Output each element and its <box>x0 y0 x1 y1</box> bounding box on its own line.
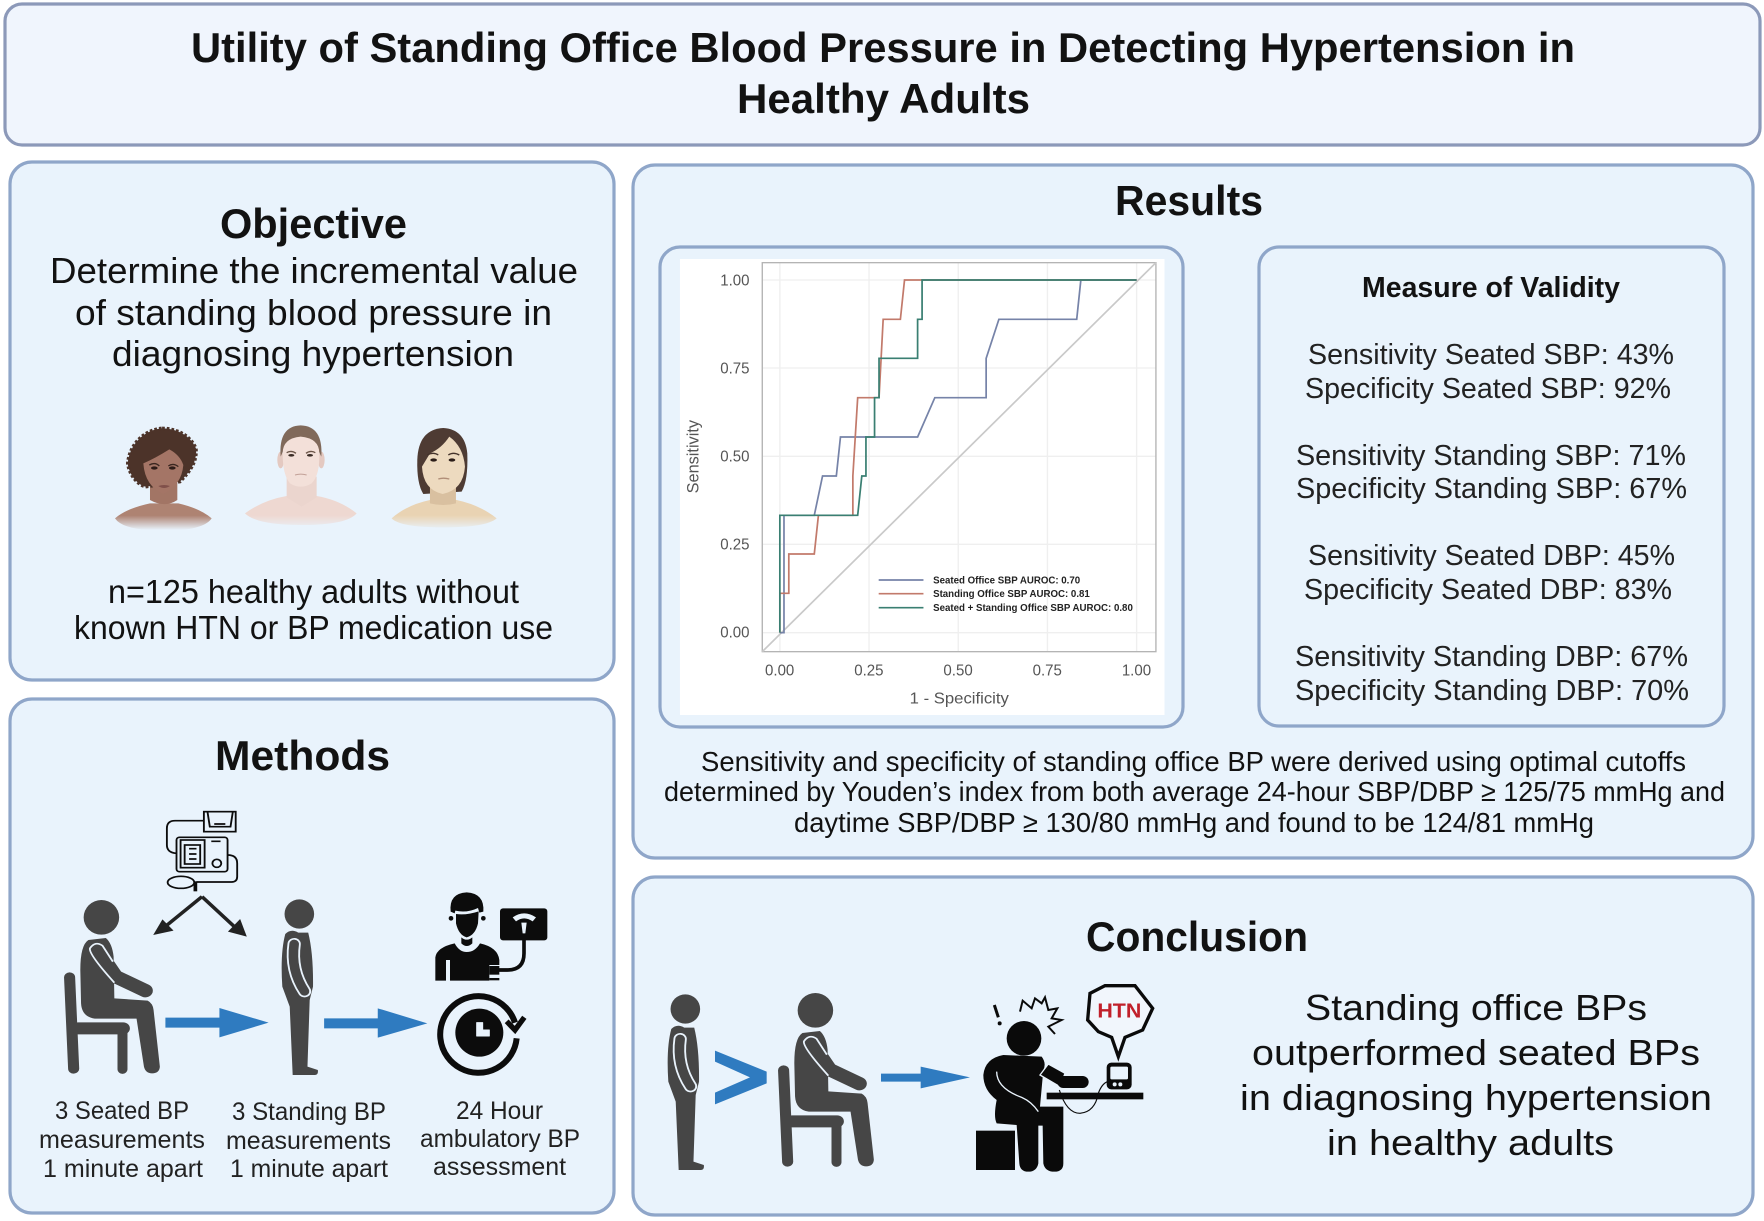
arrow: seated to standing <box>165 1008 269 1037</box>
panel: measure of validity <box>1259 247 1724 726</box>
y axis labels: 0.25 <box>720 537 750 554</box>
caption: standing: 3 Standing BP <box>232 1098 386 1126</box>
y axis labels: 1.00 <box>720 273 750 289</box>
icon: blood pressure device <box>167 812 237 891</box>
objective heading: Objective <box>220 200 407 247</box>
icon: three adult faces <box>115 425 497 531</box>
icon: standing person <box>668 994 704 1170</box>
validity: seated SBP: Specificity Seated SBP: 92% <box>1305 373 1671 405</box>
y axis labels <box>720 273 750 642</box>
results heading: Results <box>1115 177 1263 224</box>
caption: seated: measurements <box>39 1126 205 1154</box>
face: east asian woman <box>392 428 497 527</box>
objective text <box>50 250 578 374</box>
speech bubble: HTN <box>1088 986 1153 1057</box>
results description text: Sensitivity and specificity of standing office BP were derived using optimal cutoffs <box>701 746 1686 777</box>
conclusion text: Standing office BPs <box>1305 987 1647 1028</box>
chart legend: Standing Office SBP AUROC: 0.81 <box>933 589 1090 600</box>
validity: standing DBP: Sensitivity Standing DBP: 67% <box>1295 641 1688 673</box>
caption: ambulatory: 24 Hour <box>456 1097 543 1125</box>
objective sample text <box>74 573 553 646</box>
results description text <box>664 746 1725 838</box>
caption: standing <box>226 1098 391 1183</box>
caption: ambulatory <box>420 1097 580 1181</box>
methods heading: Methods <box>215 732 390 779</box>
validity: standing DBP: Specificity Standing DBP: 70% <box>1295 675 1689 707</box>
x axis labels: 0.25 <box>854 663 884 680</box>
validity: standing SBP: Sensitivity Standing SBP: 71% <box>1296 440 1686 472</box>
title <box>191 24 1575 122</box>
validity: standing SBP: Specificity Standing SBP: 67% <box>1296 473 1687 505</box>
y axis labels: 0.00 <box>720 625 750 642</box>
objective text: of standing blood pressure in <box>75 292 552 333</box>
validity: standing SBP <box>1296 440 1687 505</box>
face: dark skin woman <box>115 428 212 531</box>
conclusion text: in diagnosing hypertension <box>1240 1077 1712 1118</box>
comparison and arrow <box>715 1051 970 1104</box>
caption: standing: 1 minute apart <box>230 1155 388 1183</box>
validity: seated DBP: Specificity Seated DBP: 83% <box>1304 574 1672 606</box>
icon: patient with hypertension reading <box>976 986 1153 1172</box>
chart legend: Seated + Standing Office SBP AUROC: 0.80 <box>933 603 1133 614</box>
icon: standing person <box>282 899 318 1075</box>
x axis labels: 0.75 <box>1033 663 1062 680</box>
panel: ROC chart card <box>660 247 1183 727</box>
objective text: diagnosing hypertension <box>112 333 514 374</box>
curve: seated plus standing office SBP <box>780 280 1137 633</box>
validity: seated DBP: Sensitivity Seated DBP: 45% <box>1308 540 1675 572</box>
icon: 24 hour clock <box>440 996 524 1073</box>
objective text: Determine the incremental value <box>50 250 578 291</box>
title panel <box>5 4 1760 145</box>
x axis labels: 0.00 <box>765 663 794 680</box>
title: Utility of Standing Office Blood Pressure in Detecting Hypertension in <box>191 24 1575 71</box>
conclusion heading: Conclusion <box>1086 913 1308 960</box>
panel: objective <box>10 162 614 680</box>
x axis labels <box>765 663 1151 680</box>
title: Healthy Adults <box>737 75 1030 122</box>
ROC chart <box>680 259 1165 715</box>
validity: standing DBP <box>1295 641 1689 707</box>
conclusion text: in healthy adults <box>1327 1122 1614 1163</box>
panel: methods <box>10 699 614 1213</box>
validity: seated SBP <box>1305 339 1674 405</box>
conclusion text <box>1240 987 1712 1163</box>
validity: seated DBP <box>1304 540 1675 606</box>
panel: conclusion <box>633 877 1753 1215</box>
caption: seated: 3 Seated BP <box>55 1097 189 1125</box>
caption: seated: 1 minute apart <box>43 1155 203 1183</box>
results description text: daytime SBP/DBP ≥ 130/80 mmHg and found to be 124/81 mmHg <box>794 807 1594 838</box>
chart legend <box>879 576 1133 614</box>
x axis title: 1 - Specificity <box>910 691 1009 707</box>
conclusion text: outperformed seated BPs <box>1252 1032 1700 1073</box>
panel: results <box>633 165 1753 858</box>
arrow: standing to ambulatory <box>324 1008 427 1038</box>
caption: seated <box>39 1097 205 1183</box>
results description text: determined by Youden’s index from both average 24-hour SBP/DBP ≥ 125/75 mmHg and <box>664 776 1725 807</box>
curve: standing office SBP <box>780 280 1137 633</box>
objective sample text: known HTN or BP medication use <box>74 609 553 646</box>
speech bubble: HTN: HTN <box>1097 999 1141 1022</box>
arrows: device to postures <box>153 897 247 937</box>
icon: seated person <box>70 900 160 1073</box>
icon: ambulatory monitor and person <box>435 892 547 981</box>
curve: seated office SBP <box>780 280 1137 633</box>
objective sample text: n=125 healthy adults without <box>108 573 519 610</box>
icon: seated person <box>784 993 874 1166</box>
y axis title: Sensitivity <box>685 420 703 493</box>
y axis labels: 0.75 <box>720 361 750 377</box>
caption: ambulatory: assessment <box>433 1153 566 1181</box>
x axis labels: 1.00 <box>1122 663 1151 680</box>
caption: standing: measurements <box>226 1127 391 1155</box>
chart legend: Seated Office SBP AUROC: 0.70 <box>933 576 1081 587</box>
face: light skin man <box>245 425 357 525</box>
caption: ambulatory: ambulatory BP <box>420 1125 580 1153</box>
validity heading: Measure of Validity <box>1362 272 1620 304</box>
validity: seated SBP: Sensitivity Seated SBP: 43% <box>1308 339 1674 371</box>
x axis labels: 0.50 <box>943 663 973 680</box>
methods flow diagram <box>70 812 427 1075</box>
y axis labels: 0.50 <box>720 449 750 466</box>
